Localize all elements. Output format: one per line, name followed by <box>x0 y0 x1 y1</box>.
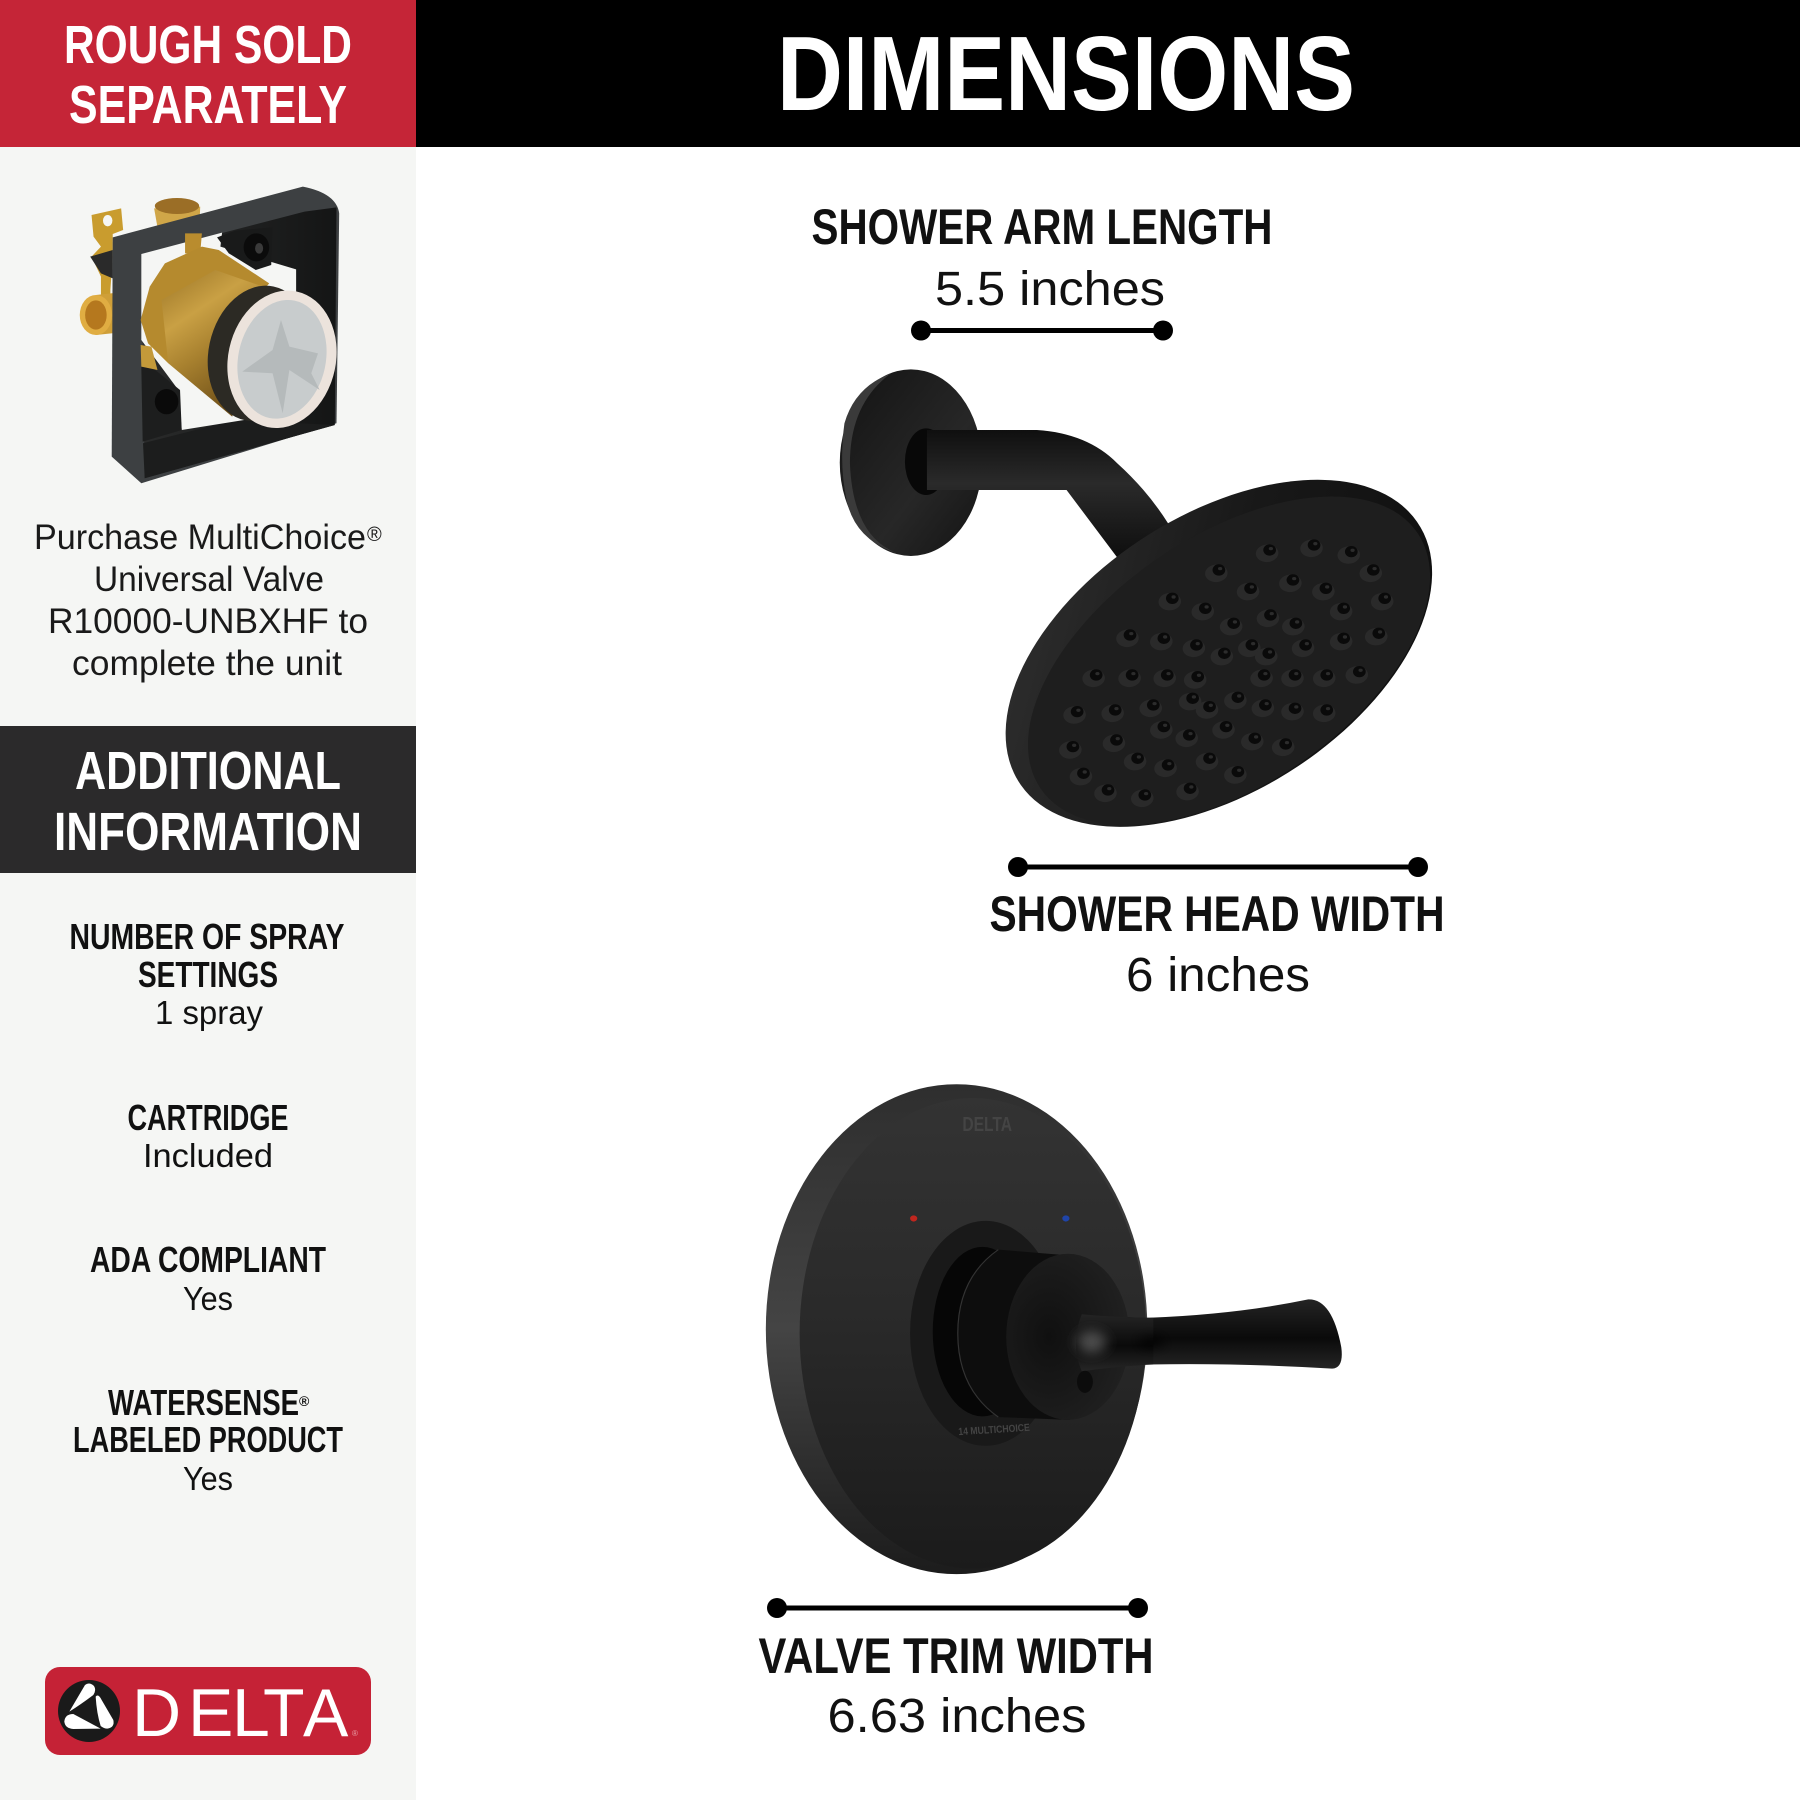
image: valve trim and lever handle <box>766 1084 1342 1574</box>
heading: additional information: INFORMATION <box>54 802 362 862</box>
spec: watersense labeled product <box>73 1382 343 1497</box>
text: purchase note: Universal Valve <box>94 560 324 599</box>
spec: watersense labeled product: WATERSENSE <box>108 1382 299 1423</box>
dimension: valve trim width: 6.63 inches <box>828 1690 1086 1743</box>
image: universal rough-in valve <box>80 187 349 483</box>
title banner: dimensions <box>416 0 1800 147</box>
logo: delta <box>45 1667 371 1755</box>
dimension: shower arm length: 5.5 inches <box>935 263 1165 316</box>
dimension: valve trim width: VALVE TRIM WIDTH <box>758 1628 1154 1684</box>
spec: number of spray settings <box>70 916 344 1031</box>
heading: additional information: ADDITIONAL <box>75 741 341 801</box>
dimension: shower arm length <box>812 199 1272 340</box>
logo: delta: DELTA <box>132 1675 349 1751</box>
dimension: shower head width <box>990 857 1444 1002</box>
spec: ada compliant <box>90 1239 326 1317</box>
title banner: dimensions: DIMENSIONS <box>777 15 1355 133</box>
dimension: shower head width: 6 inches <box>1126 949 1310 1002</box>
dimension: shower head width: SHOWER HEAD WIDTH <box>990 886 1444 942</box>
spec: watersense labeled product: ® <box>299 1393 310 1409</box>
spec: cartridge: Included <box>143 1137 273 1174</box>
text: purchase note: complete the unit <box>72 644 342 683</box>
logo: delta: ® <box>352 1729 358 1738</box>
spec: cartridge: CARTRIDGE <box>128 1097 288 1138</box>
red banner: rough sold separately: SEPARATELY <box>69 75 347 135</box>
spec: ada compliant: ADA COMPLIANT <box>90 1239 326 1280</box>
text: purchase note <box>34 518 382 683</box>
nozzles <box>1055 536 1398 811</box>
dimension: valve trim width <box>758 1598 1154 1743</box>
spec: number of spray settings: NUMBER OF SPRAY <box>70 916 344 957</box>
text: purchase note: Purchase MultiChoice <box>34 518 366 557</box>
text: purchase note: R10000-UNBXHF to <box>48 602 368 641</box>
image: valve trim and lever handle: 14 MULTICHOICE <box>958 1422 1030 1438</box>
spec: cartridge <box>128 1097 288 1174</box>
image: shower head and arm <box>840 369 1514 890</box>
image: valve trim and lever handle: DELTA <box>962 1112 1012 1136</box>
red banner: rough sold separately <box>0 0 416 147</box>
red banner: rough sold separately: ROUGH SOLD <box>64 15 352 75</box>
heading: additional information <box>0 726 416 873</box>
spec: watersense labeled product: LABELED PRODUCT <box>73 1419 343 1460</box>
sidebar background <box>0 0 416 1800</box>
spec: number of spray settings: 1 spray <box>155 994 263 1031</box>
spec: watersense labeled product: Yes <box>183 1460 233 1497</box>
text: purchase note: ® <box>367 524 382 546</box>
spec: number of spray settings: SETTINGS <box>138 954 278 995</box>
spec: ada compliant: Yes <box>183 1280 233 1317</box>
dimension: shower arm length: SHOWER ARM LENGTH <box>812 199 1272 255</box>
